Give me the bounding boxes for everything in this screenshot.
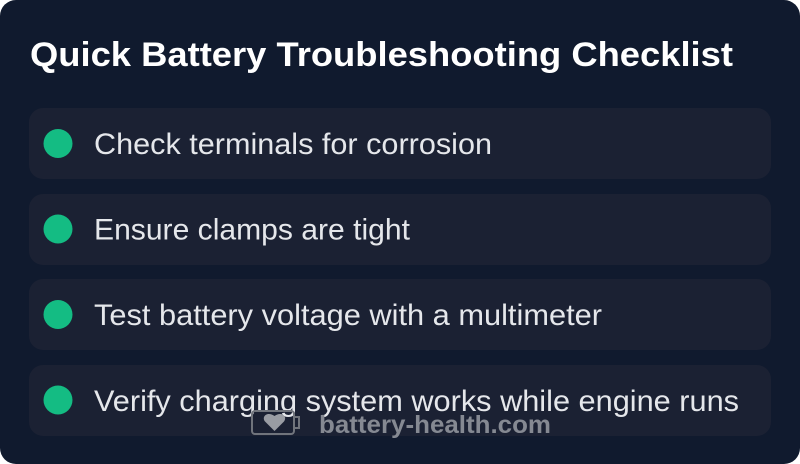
checklist item: voltage: [29, 279, 771, 350]
checklist item: clamps: Ensure clamps are tight: [94, 214, 411, 246]
checklist item: corrosion: [29, 108, 771, 179]
checklist item: charging system: Verify charging system works while engine runs: [94, 385, 739, 418]
watermark: battery-health.com: [252, 411, 551, 439]
watermark text: battery-health.com: [319, 411, 551, 439]
icon: battery with heart: [252, 411, 299, 434]
checklist item: voltage: Test battery voltage with a multimeter: [94, 299, 602, 332]
checklist item: clamps: [29, 194, 771, 265]
checklist item: corrosion: Check terminals for corrosion: [94, 128, 492, 161]
title: Quick Battery Troubleshooting Checklist: [30, 36, 733, 74]
checklist item: charging system: [29, 365, 771, 436]
